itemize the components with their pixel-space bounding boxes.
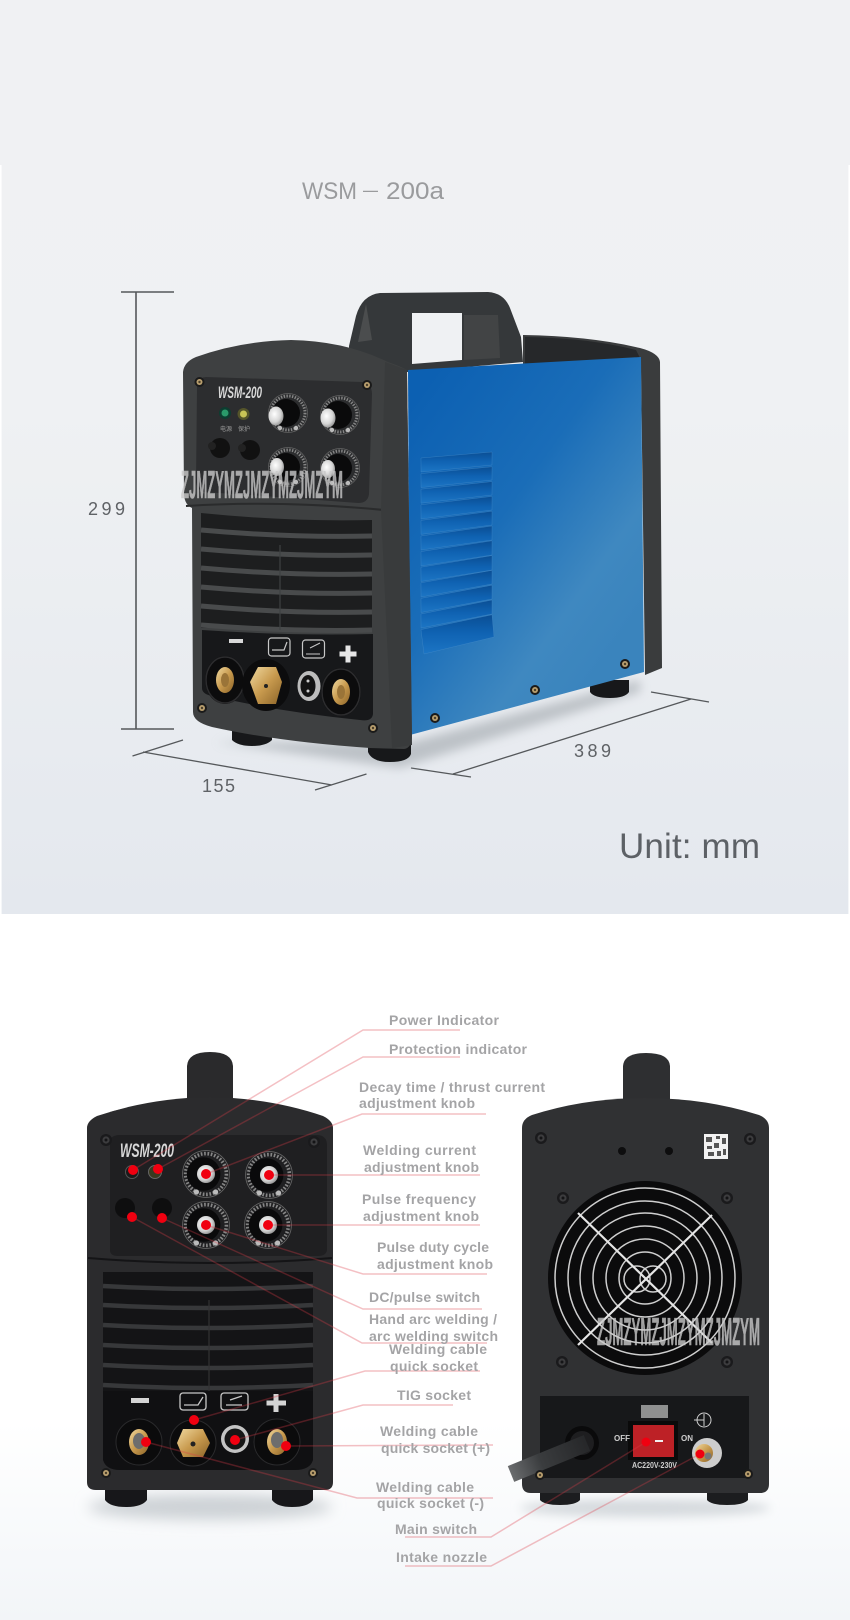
- socket panel: [202, 630, 373, 720]
- bottom screws: [101, 1468, 111, 1478]
- rear shadow: [520, 1499, 770, 1517]
- body screws: [535, 1132, 547, 1144]
- toggle switches: [208, 438, 260, 460]
- leader lines: [132, 1030, 700, 1566]
- dimension: width 155: 155: [202, 776, 235, 796]
- casing screws: [197, 703, 207, 713]
- label: welding cable quick socket: [389, 1341, 487, 1374]
- label: intake nozzle: Intake nozzle: [396, 1549, 487, 1565]
- label: quick socket plus: [380, 1423, 490, 1456]
- illustration: rear view of welder: [511, 1053, 770, 1517]
- adjustment knobs: [268, 394, 360, 488]
- socket symbols: [131, 1393, 286, 1412]
- ground symbol: [694, 1413, 711, 1427]
- front feet: [232, 730, 411, 762]
- sockets: [116, 1419, 300, 1466]
- screws on control face: [100, 1134, 112, 1146]
- handle: [187, 1052, 233, 1100]
- rear handle: [623, 1053, 670, 1100]
- front shadow: [88, 1494, 332, 1520]
- switch labels: AC220V-230V: [632, 1461, 678, 1470]
- indicator lamps: [126, 1166, 162, 1178]
- label: welding current: [363, 1142, 479, 1175]
- switch labels: ON: [681, 1434, 693, 1443]
- dimension: width 155: [132, 740, 366, 796]
- main power switch: [628, 1421, 678, 1460]
- recessed control panel: [110, 1135, 327, 1256]
- dimension: height 299: [88, 292, 174, 729]
- rear body: [522, 1098, 769, 1493]
- toggles: [115, 1198, 172, 1218]
- dimension: depth 389: [411, 692, 709, 777]
- label: main switch: Main switch: [395, 1521, 477, 1537]
- label: quick socket minus: quick socket (-): [377, 1495, 484, 1511]
- blue side panel: [408, 357, 644, 735]
- vent holes: [618, 1147, 673, 1155]
- output sockets: [205, 656, 361, 716]
- label: pulse duty cycle: Pulse duty cycle: [377, 1239, 489, 1255]
- rear rim: [523, 335, 662, 675]
- intake nozzle: [692, 1438, 722, 1468]
- label: pulse frequency: Pulse frequency: [362, 1191, 476, 1207]
- label: decay time: Decay time / thrust current: [359, 1079, 545, 1095]
- label: hand arc switch: Hand arc welding /: [369, 1311, 497, 1327]
- label: power indicator: Power Indicator: [389, 1012, 500, 1028]
- side louvres: [421, 452, 494, 654]
- switch labels: OFF: [614, 1434, 630, 1443]
- power cable and gland: [511, 1426, 599, 1474]
- indicators: 电源: [220, 425, 232, 433]
- label: quick socket minus: [376, 1479, 484, 1511]
- indicators: [219, 407, 250, 433]
- socket panel: [103, 1391, 313, 1470]
- grille: [103, 1272, 313, 1392]
- label: hand arc switch: arc welding switch: [369, 1328, 498, 1344]
- label: pulse duty cycle: [377, 1239, 493, 1272]
- label: welding current: Welding current: [363, 1142, 476, 1158]
- heading: model name: WSM: [302, 178, 357, 205]
- caption: unit: Unit: mm: [619, 827, 760, 866]
- label: quick socket plus: Welding cable: [380, 1423, 478, 1439]
- carry handle: [349, 292, 523, 372]
- label: welding cable quick socket: Welding cable: [389, 1341, 487, 1357]
- label: TIG socket: TIG socket: [397, 1387, 471, 1403]
- dimension: height 299: 299: [88, 499, 125, 519]
- side panel screws: [430, 713, 440, 723]
- warning label: [641, 1405, 668, 1418]
- casing: [87, 1097, 333, 1490]
- callout markers: [127, 1164, 704, 1458]
- face screws: [194, 377, 204, 387]
- label: hand arc switch: [369, 1311, 498, 1344]
- front grille: [201, 513, 372, 630]
- label: decay time: adjustment knob: [359, 1095, 475, 1111]
- label: pulse duty cycle: adjustment knob: [377, 1256, 493, 1272]
- model badge: WSM-200: [218, 383, 262, 402]
- label: welding cable quick socket: quick socket: [390, 1358, 478, 1374]
- background: upper grey panel: [0, 0, 850, 914]
- knobs: [183, 1151, 292, 1248]
- rear connector panel: [540, 1396, 749, 1478]
- model badge: WSM-200: [120, 1141, 174, 1162]
- label: quick socket minus: Welding cable: [376, 1479, 474, 1495]
- polarity and process symbols: [229, 638, 356, 662]
- rear feet: [540, 1490, 748, 1505]
- label: pulse frequency: adjustment knob: [363, 1208, 479, 1224]
- dimension: depth 389: 389: [574, 741, 611, 761]
- illustration: welder front three-quarter view: [183, 292, 662, 768]
- callout labels: [359, 1012, 545, 1565]
- rear feet: [590, 680, 629, 698]
- switch labels: [614, 1434, 693, 1470]
- floor shadow: [215, 680, 640, 768]
- control panel recess: [196, 377, 372, 503]
- label: DC/pulse switch: DC/pulse switch: [369, 1289, 480, 1305]
- label: quick socket plus: quick socket (+): [381, 1440, 490, 1456]
- background: lower white panel: [0, 914, 850, 1620]
- label: welding current: adjustment knob: [364, 1159, 479, 1175]
- cooling fan and guard: [548, 1181, 742, 1375]
- rear rim: [110, 1098, 307, 1112]
- fan screws: [557, 1192, 569, 1204]
- label: protection indicator: Protection indicator: [389, 1041, 528, 1057]
- heading: model name: [302, 178, 445, 205]
- illustration: front view of welder: [87, 1052, 333, 1520]
- label: decay time: [359, 1079, 545, 1111]
- indicators: 保护: [238, 425, 250, 433]
- QR label: [704, 1134, 728, 1159]
- heading: model name: 200a: [386, 178, 445, 205]
- corner screws: [743, 1469, 753, 1479]
- feet: [105, 1488, 313, 1507]
- text: ZJMZYMZJMZYMZJMZYM: [181, 464, 343, 507]
- heading: model name: –: [363, 180, 378, 200]
- label: pulse frequency: [362, 1191, 479, 1224]
- front face casing: [183, 340, 412, 749]
